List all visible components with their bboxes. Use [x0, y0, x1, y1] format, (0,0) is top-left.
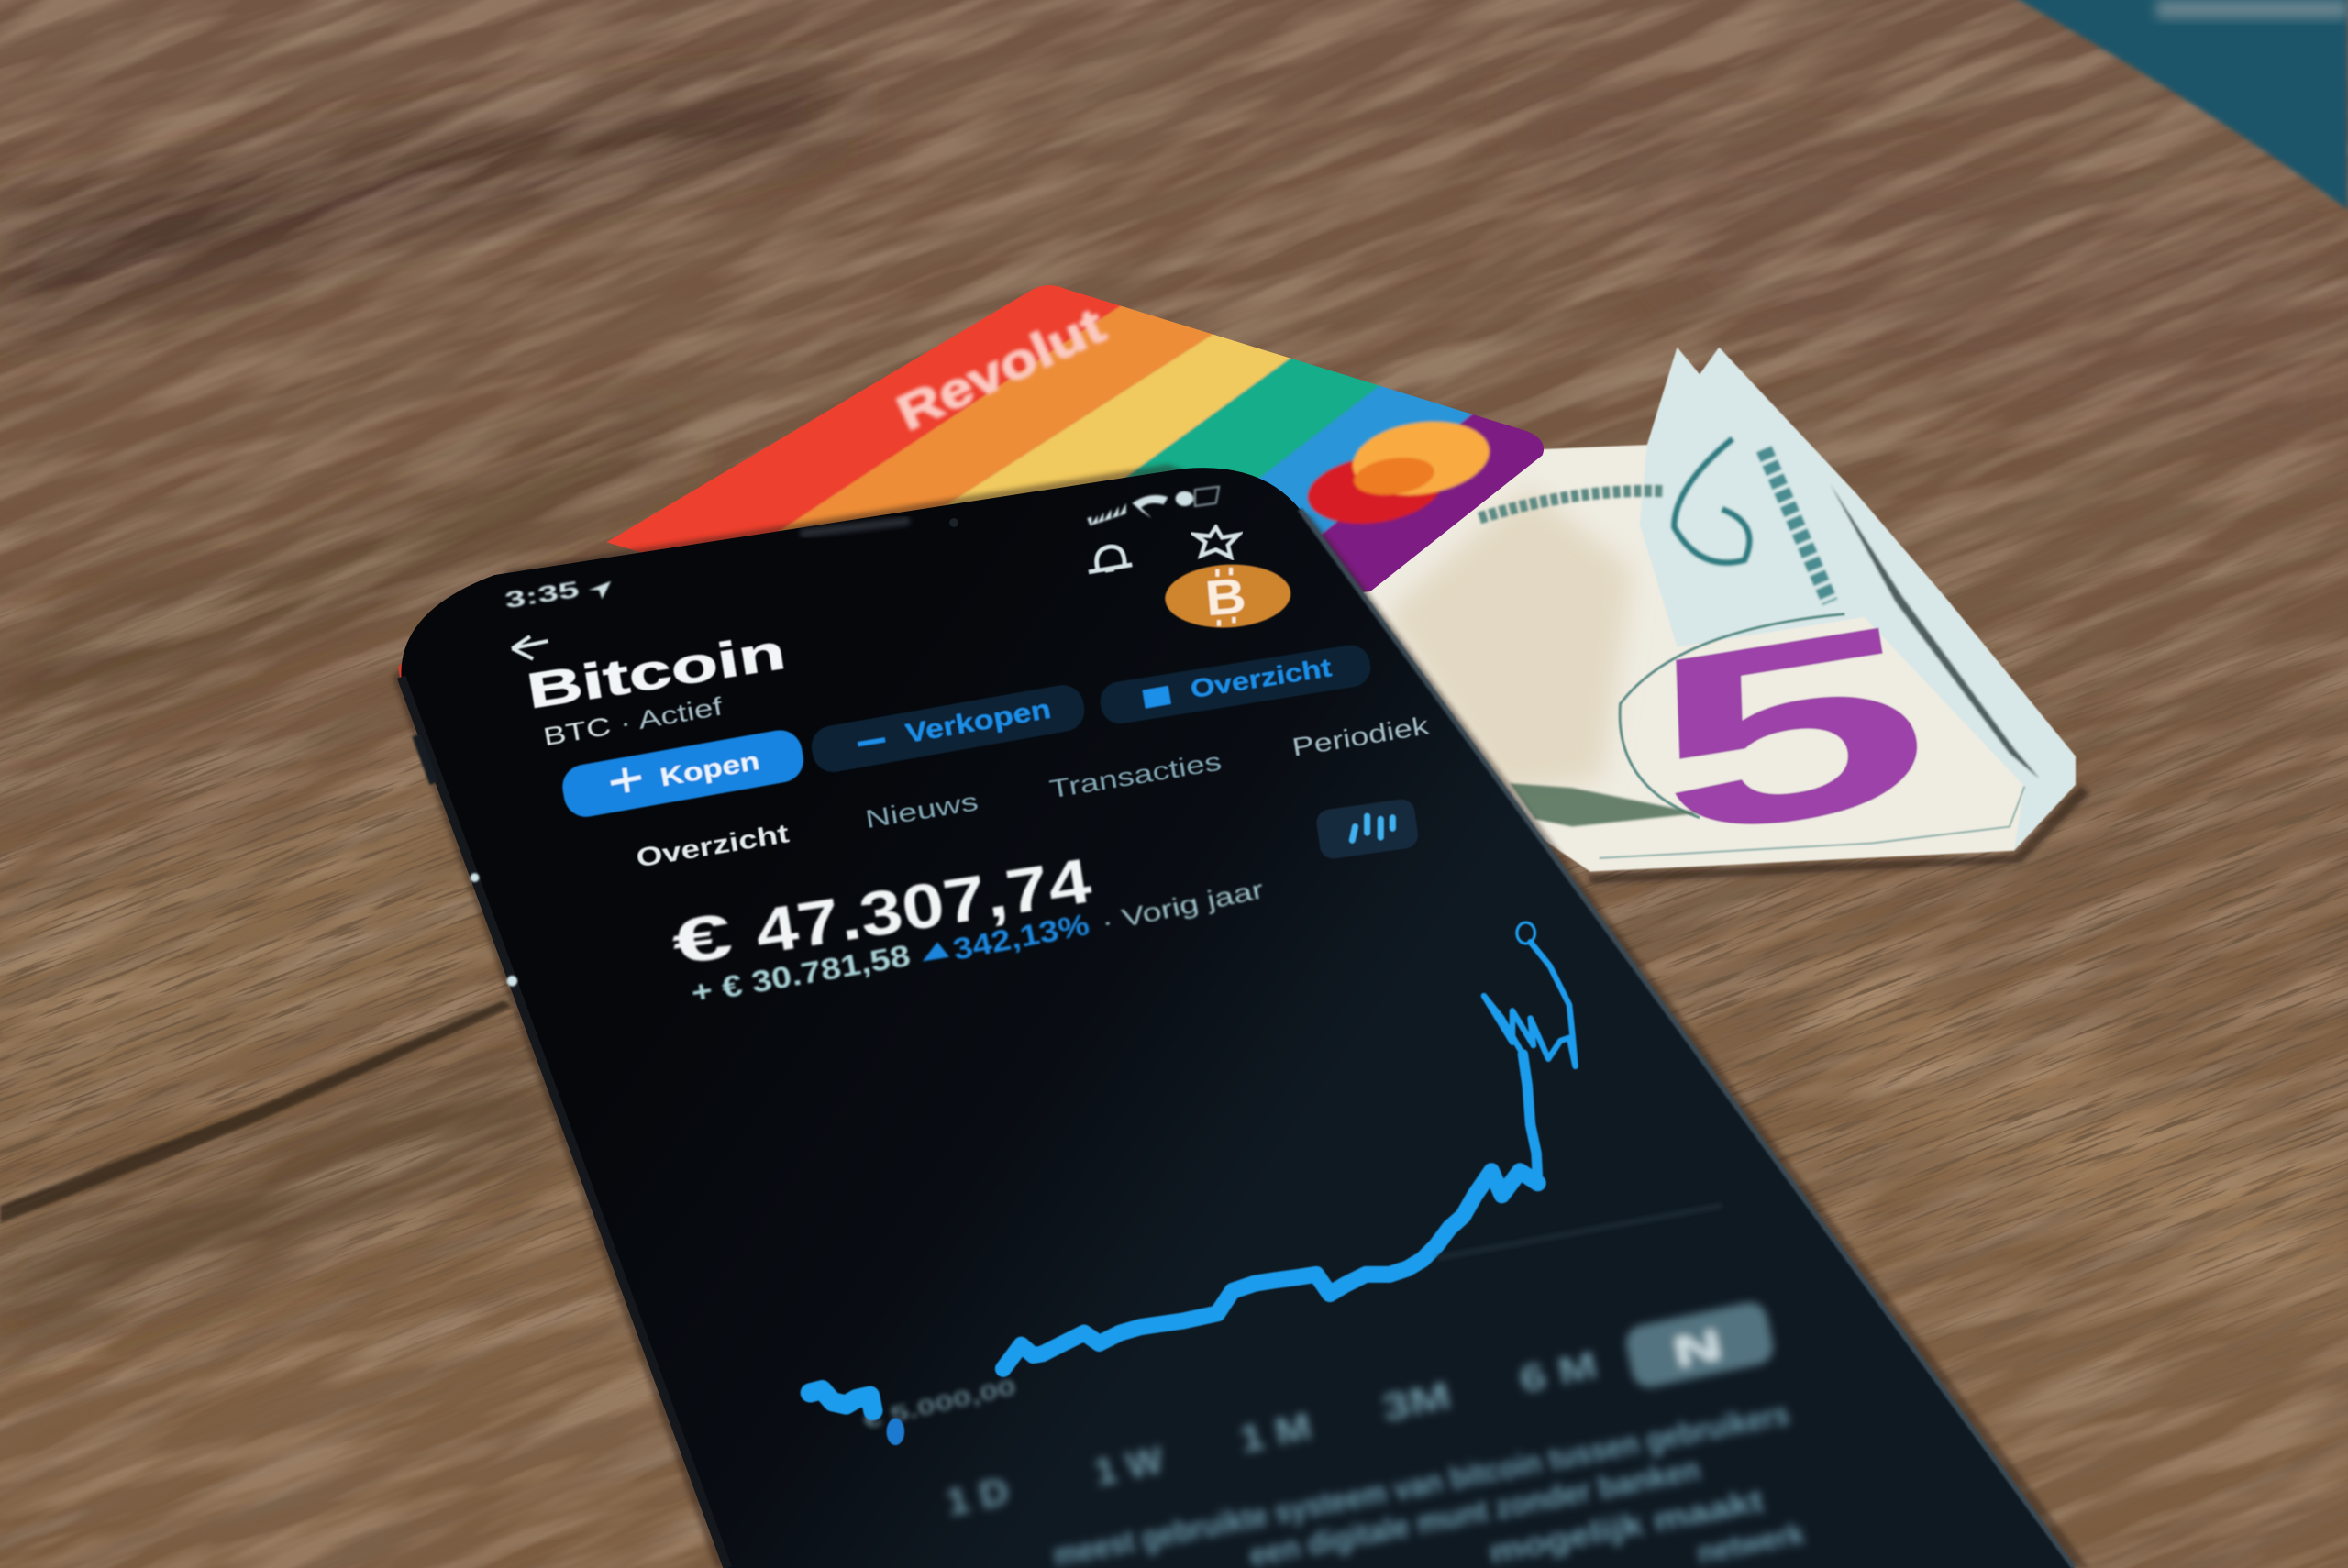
- card: red band: [554, 255, 1198, 569]
- card: orange band: [778, 305, 1214, 532]
- tab: news: Nieuws: [863, 787, 980, 834]
- status: battery: [1176, 491, 1193, 506]
- phone: right edge highlight: [1300, 509, 2074, 1568]
- chart: steep segment: [1523, 1055, 1538, 1183]
- chart: low segment: [810, 1390, 873, 1411]
- chart: baseline: [1437, 1206, 1722, 1258]
- period selector: [942, 1343, 1600, 1524]
- banknote: numeral circle: [1620, 614, 1844, 818]
- banknote: pale blue flap: [1640, 348, 2076, 851]
- rainbow payment card: [607, 285, 1545, 592]
- icon: favourite star: [1195, 527, 1238, 558]
- price change: · Vorig jaar: [1099, 875, 1266, 937]
- front camera: [949, 518, 958, 527]
- period: 1 day: 1 D: [942, 1469, 1013, 1524]
- card: network logo: [1303, 413, 1494, 532]
- chart: low dip: [887, 1419, 904, 1445]
- banknote: face: [1356, 348, 2076, 872]
- tab: transactions: Transacties: [1047, 747, 1224, 803]
- icon: bitcoin coin: [1164, 561, 1292, 631]
- icon: chart type toggle: [1315, 798, 1420, 860]
- icon: notification bell: [1089, 547, 1132, 572]
- price: 47.307,74: [750, 845, 1096, 967]
- banknote: engraving: [1479, 439, 1830, 602]
- card: purple base: [1321, 414, 1545, 592]
- period: selected pill: N: [1669, 1320, 1726, 1376]
- chart: peak segment: [1484, 942, 1576, 1066]
- chart: main rising segment: [1003, 1171, 1538, 1369]
- tab: recurring: Periodiek: [1290, 711, 1431, 762]
- card: brand wordmark: Revolut: [889, 298, 1113, 441]
- banknote: bottom fold lines: [1600, 786, 2024, 858]
- button: overview: [1098, 643, 1373, 726]
- banknote: portrait corner detail: [1510, 783, 1700, 827]
- card sliver left of phone: [398, 659, 412, 696]
- phone: side buttons: [413, 734, 517, 986]
- banknote: five dollars: [1356, 348, 2089, 892]
- banknote: fold shadow: [1830, 484, 2040, 778]
- smartphone: [401, 468, 2074, 1568]
- table: sharp grain cracks in the focal band: [0, 546, 2348, 1394]
- banknote: aged patch: [1385, 487, 1633, 794]
- status: time: 3:35: [504, 578, 581, 613]
- phone: body: [401, 468, 2074, 1568]
- period: 3 months: 3M: [1379, 1374, 1455, 1430]
- card: yellow band: [943, 334, 1292, 506]
- icon: back arrow: [512, 636, 548, 659]
- table: plank crack: [0, 1000, 512, 1223]
- heading: Bitcoin: Bitcoin: [523, 624, 789, 719]
- price change: [689, 875, 1266, 1010]
- period: 6 months: 6 M: [1516, 1343, 1600, 1401]
- price change: 342,13%: [950, 907, 1091, 966]
- price change: + € 30.781,58: [689, 938, 913, 1010]
- card: green band: [1124, 358, 1381, 479]
- button: buy: [559, 726, 807, 821]
- icon: bitcoin coin: B: [1203, 569, 1248, 626]
- price line chart: [810, 922, 1576, 1445]
- tabs: [634, 711, 1431, 874]
- period: selected pill: [1623, 1299, 1777, 1390]
- phone shadow: [393, 464, 2089, 1568]
- chart: last price marker: [1517, 922, 1534, 944]
- banknote: shadow: [1588, 785, 2089, 884]
- button: buy: Kopen: [658, 746, 761, 791]
- button: overview: Overzicht: [1189, 653, 1334, 703]
- banknote: large purple five: 5: [1631, 569, 1948, 892]
- subtitle: ticker: BTC · Actief: [541, 691, 725, 751]
- status: signal: [1087, 503, 1126, 525]
- speaker notch: [804, 521, 906, 533]
- button: sell: [808, 682, 1088, 776]
- tab: overview: Overzicht: [634, 819, 792, 874]
- price: [668, 845, 1096, 978]
- button: sell: Verkopen: [903, 694, 1053, 749]
- description paragraph: meest gebruikte systeem van bitcoin tussen gebruikers: [1050, 1397, 1792, 1568]
- phone: left edge: [402, 677, 727, 1568]
- status bar: [504, 487, 1219, 613]
- period: 1 week: 1 W: [1091, 1438, 1168, 1494]
- card: blue band: [1257, 385, 1474, 536]
- status: wifi: [1132, 495, 1168, 518]
- price: €: [668, 900, 737, 978]
- chart: axis label: € 5.000,00: [861, 1375, 1018, 1434]
- period: 1 month: 1 M: [1235, 1405, 1315, 1461]
- table: blue floor corner: [2007, 0, 2348, 210]
- status: location arrow: [589, 581, 611, 599]
